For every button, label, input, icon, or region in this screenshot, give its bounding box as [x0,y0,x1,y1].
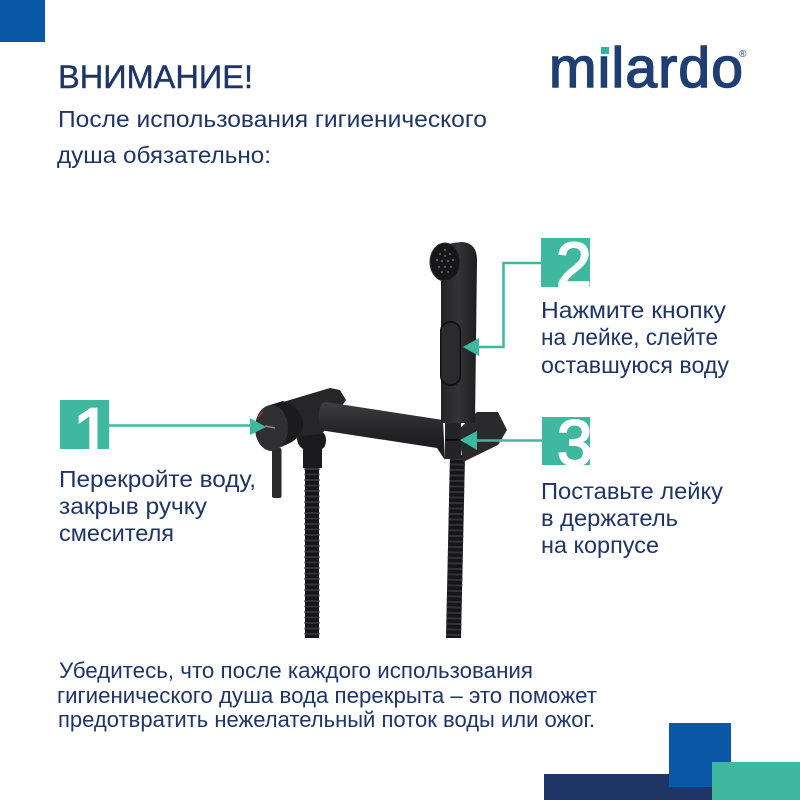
step 1 text: Перекройте воду, [59,466,256,492]
step 2 badge: 2 [556,229,592,301]
shower hose [446,455,465,638]
subtitle [57,106,487,168]
step 2 text: Нажмите кнопку [541,297,727,323]
step 2 text [541,297,729,378]
logo: milardo: ® [739,49,747,60]
step 3 text [541,478,724,558]
step 3 text: Поставьте лейку [541,478,724,504]
arrow 3 [460,431,542,450]
faucet illustration [255,242,507,638]
decorative corner square [0,0,45,42]
step 3 text: в держатель [541,505,678,531]
arrow 1 [109,418,266,435]
wall mount right [458,412,507,462]
step 1 badge: 1 [73,394,111,471]
mixer knob [255,401,303,451]
step 3 text: на корпусе [541,532,659,558]
decorative corner blocks [544,723,800,800]
bottom note [57,658,597,732]
step 1 text: смесителя [59,520,174,546]
arrow 2 [463,263,541,356]
step 3 badge: 3 [557,407,593,479]
bottom note: предотвратить нежелательный поток воды или ожог. [58,707,595,732]
elbow connector [297,430,326,468]
step 2 text: на лейке, слейте [541,324,718,350]
hand shower [430,242,477,423]
mixer lever handle [272,448,282,498]
step 1 text: закрыв ручку [59,493,208,519]
bottom note: Убедитесь, что после каждого использования [59,658,533,683]
title: ВНИМАНИЕ! [58,59,253,95]
subtitle: После использования гигиенического [58,106,487,132]
step 1 badge [60,400,109,449]
bottom note: гигиенического душа вода перекрыта – это поможет [57,683,597,708]
wall hose [305,450,319,638]
holder [445,420,461,459]
logo: milardo: milardo [549,36,743,100]
subtitle: душа обязательно: [57,142,271,168]
spout [319,402,445,460]
step 1 text [59,466,256,546]
wall mount left [283,388,346,436]
step 2 text: оставшуюся воду [541,352,729,378]
